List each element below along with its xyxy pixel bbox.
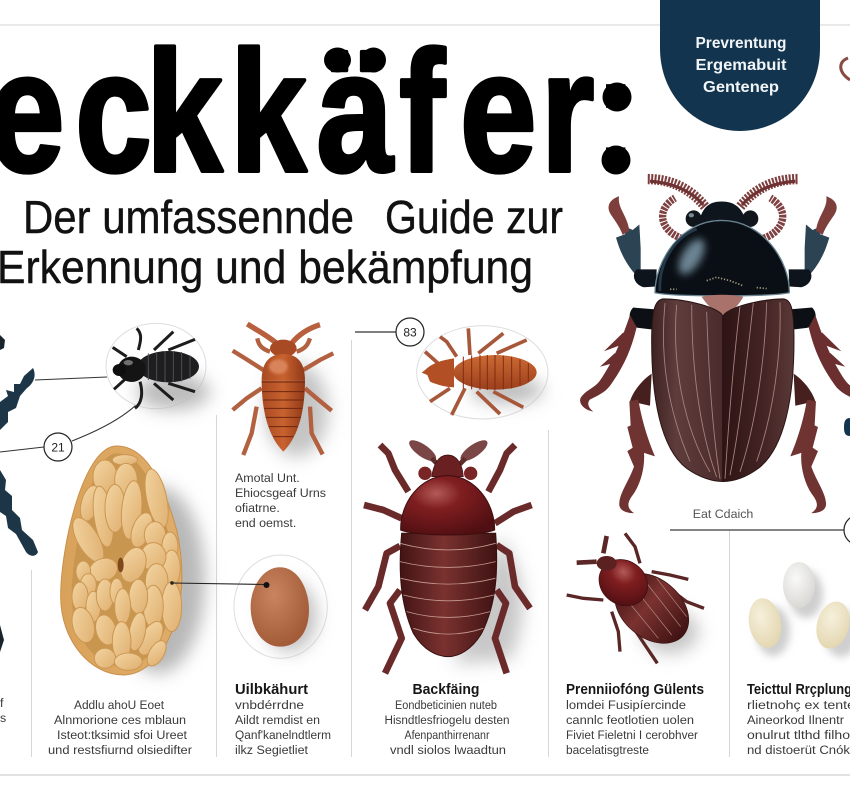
red beetle head — [418, 455, 477, 480]
subtitle: Der umfassennde — [23, 191, 354, 243]
edge fragment: right navy tab — [844, 418, 850, 436]
caption: Teicttul Rrçplung — [747, 682, 850, 757]
caption: Prenniiofóng Gülents: Fiviet Fieletni I cerobhver — [566, 728, 698, 742]
connector 83: 83 — [403, 326, 417, 340]
badge: prevention — [660, 0, 820, 131]
subtitle: Guide zur — [385, 191, 563, 243]
badge: prevention: Prevrentung — [696, 35, 786, 52]
caption: Backfäing: Afenpanthirrenanr — [404, 728, 490, 742]
left edge caption fragment: f — [0, 696, 4, 710]
connector lines to black larva — [0, 377, 136, 452]
caption: Prenniiofóng Gülents: Prenniiofóng Gülents — [566, 682, 704, 698]
red beetle abdomen — [400, 533, 497, 657]
caption: egg: Aildt remdist en — [235, 713, 320, 727]
caption: Backfäing: Eondbeticinien nuteb — [395, 698, 497, 712]
caption: Backfäing: Backfäing — [412, 682, 480, 698]
caption: red-brown larva: Amotal Unt. — [235, 471, 300, 485]
caption: egg — [235, 682, 331, 757]
brown egg in circle — [234, 555, 327, 658]
caption: Backfäing: vndl siolos lwaadtun — [390, 743, 506, 757]
caption: Teicttul Rrçplung: onulrut tlthd filho — [747, 728, 850, 742]
red-brown larva — [233, 324, 333, 457]
large red beetle — [364, 437, 532, 673]
left edge caption fragment — [0, 696, 6, 725]
white and cream eggs — [745, 562, 850, 657]
large adult beetle — [580, 179, 850, 513]
left edge dark blue creature — [0, 335, 38, 652]
orange larva in oval — [417, 326, 548, 419]
badge: prevention: Gentenep — [703, 79, 779, 96]
badge: prevention: Ergemabuit — [696, 57, 786, 74]
subtitle: Erkennung und bekämpfung — [0, 241, 533, 293]
label: large beetle: Eat Cdaich — [693, 507, 753, 521]
caption: nut cluster: Addlu ahoU Eoet — [74, 698, 165, 712]
caption: Teicttul Rrçplung: rlietnohç ex tente — [747, 698, 850, 712]
edge fragment: top right claw — [841, 58, 850, 80]
beetle elytra — [652, 295, 794, 481]
callout number 21: 21 — [51, 440, 65, 454]
beetle legs and antennae, left side — [580, 179, 705, 513]
red beetle antennae — [406, 437, 491, 467]
caption: egg: Qanf'kanelndtlerm — [235, 728, 331, 742]
left edge caption fragment: s — [0, 711, 6, 725]
caption: Prenniiofóng Gülents: lomdei Fusipíercinde — [566, 698, 686, 712]
caption: Teicttul Rrçplung: nd distoerüt Cnók — [747, 743, 850, 757]
caption: Prenniiofóng Gülents: cannlc feotlotien uolen — [566, 713, 694, 727]
caption: Prenniiofóng Gülents: bacelatisgtreste — [566, 743, 649, 757]
caption: red-brown larva — [235, 471, 326, 530]
caption: nut cluster: Isteot:tksimid sfoi Ureet — [57, 728, 188, 742]
connector from cluster to egg — [170, 581, 270, 588]
subtitle — [0, 191, 563, 293]
caption: red-brown larva: ofiatrne. — [235, 501, 280, 515]
red beetle pronotum — [401, 476, 495, 535]
title: eckkäfer: — [0, 16, 639, 209]
caption: egg: Uilbkähurt — [235, 682, 308, 698]
caption: egg: vnbdérrdne — [235, 698, 304, 712]
caption: red-brown larva: Ehiocsgeaf Urns — [235, 486, 326, 500]
black larva in circle — [106, 323, 210, 410]
caption: Teicttul Rrçplung: Aineorkod Ilnentr — [747, 713, 844, 727]
caption: nut cluster: und restsfiurnd olsiedifter — [48, 743, 192, 757]
connector 83 — [355, 318, 424, 346]
caption: nut cluster: Alnmorione ces mblaun — [54, 713, 186, 727]
connector: large beetle callout — [670, 515, 850, 545]
beetle legs and antennae, right side — [740, 179, 850, 513]
nut-like larval cluster — [61, 446, 205, 675]
caption: red-brown larva: end oemst. — [235, 516, 296, 530]
caption: egg: ilkz Segietliet — [235, 743, 309, 757]
caption: Backfäing — [384, 682, 510, 757]
beetle head and eyes — [686, 201, 758, 227]
callout number 21 — [44, 433, 72, 461]
beetle pronotum — [655, 220, 789, 296]
caption: nut cluster — [48, 698, 192, 757]
caption: Backfäing: Hisndtlesfriogelu desten — [384, 713, 510, 727]
caption: Prenniiofóng Gülents — [566, 682, 704, 757]
small red beetle — [567, 533, 704, 663]
red beetle legs — [364, 445, 532, 673]
